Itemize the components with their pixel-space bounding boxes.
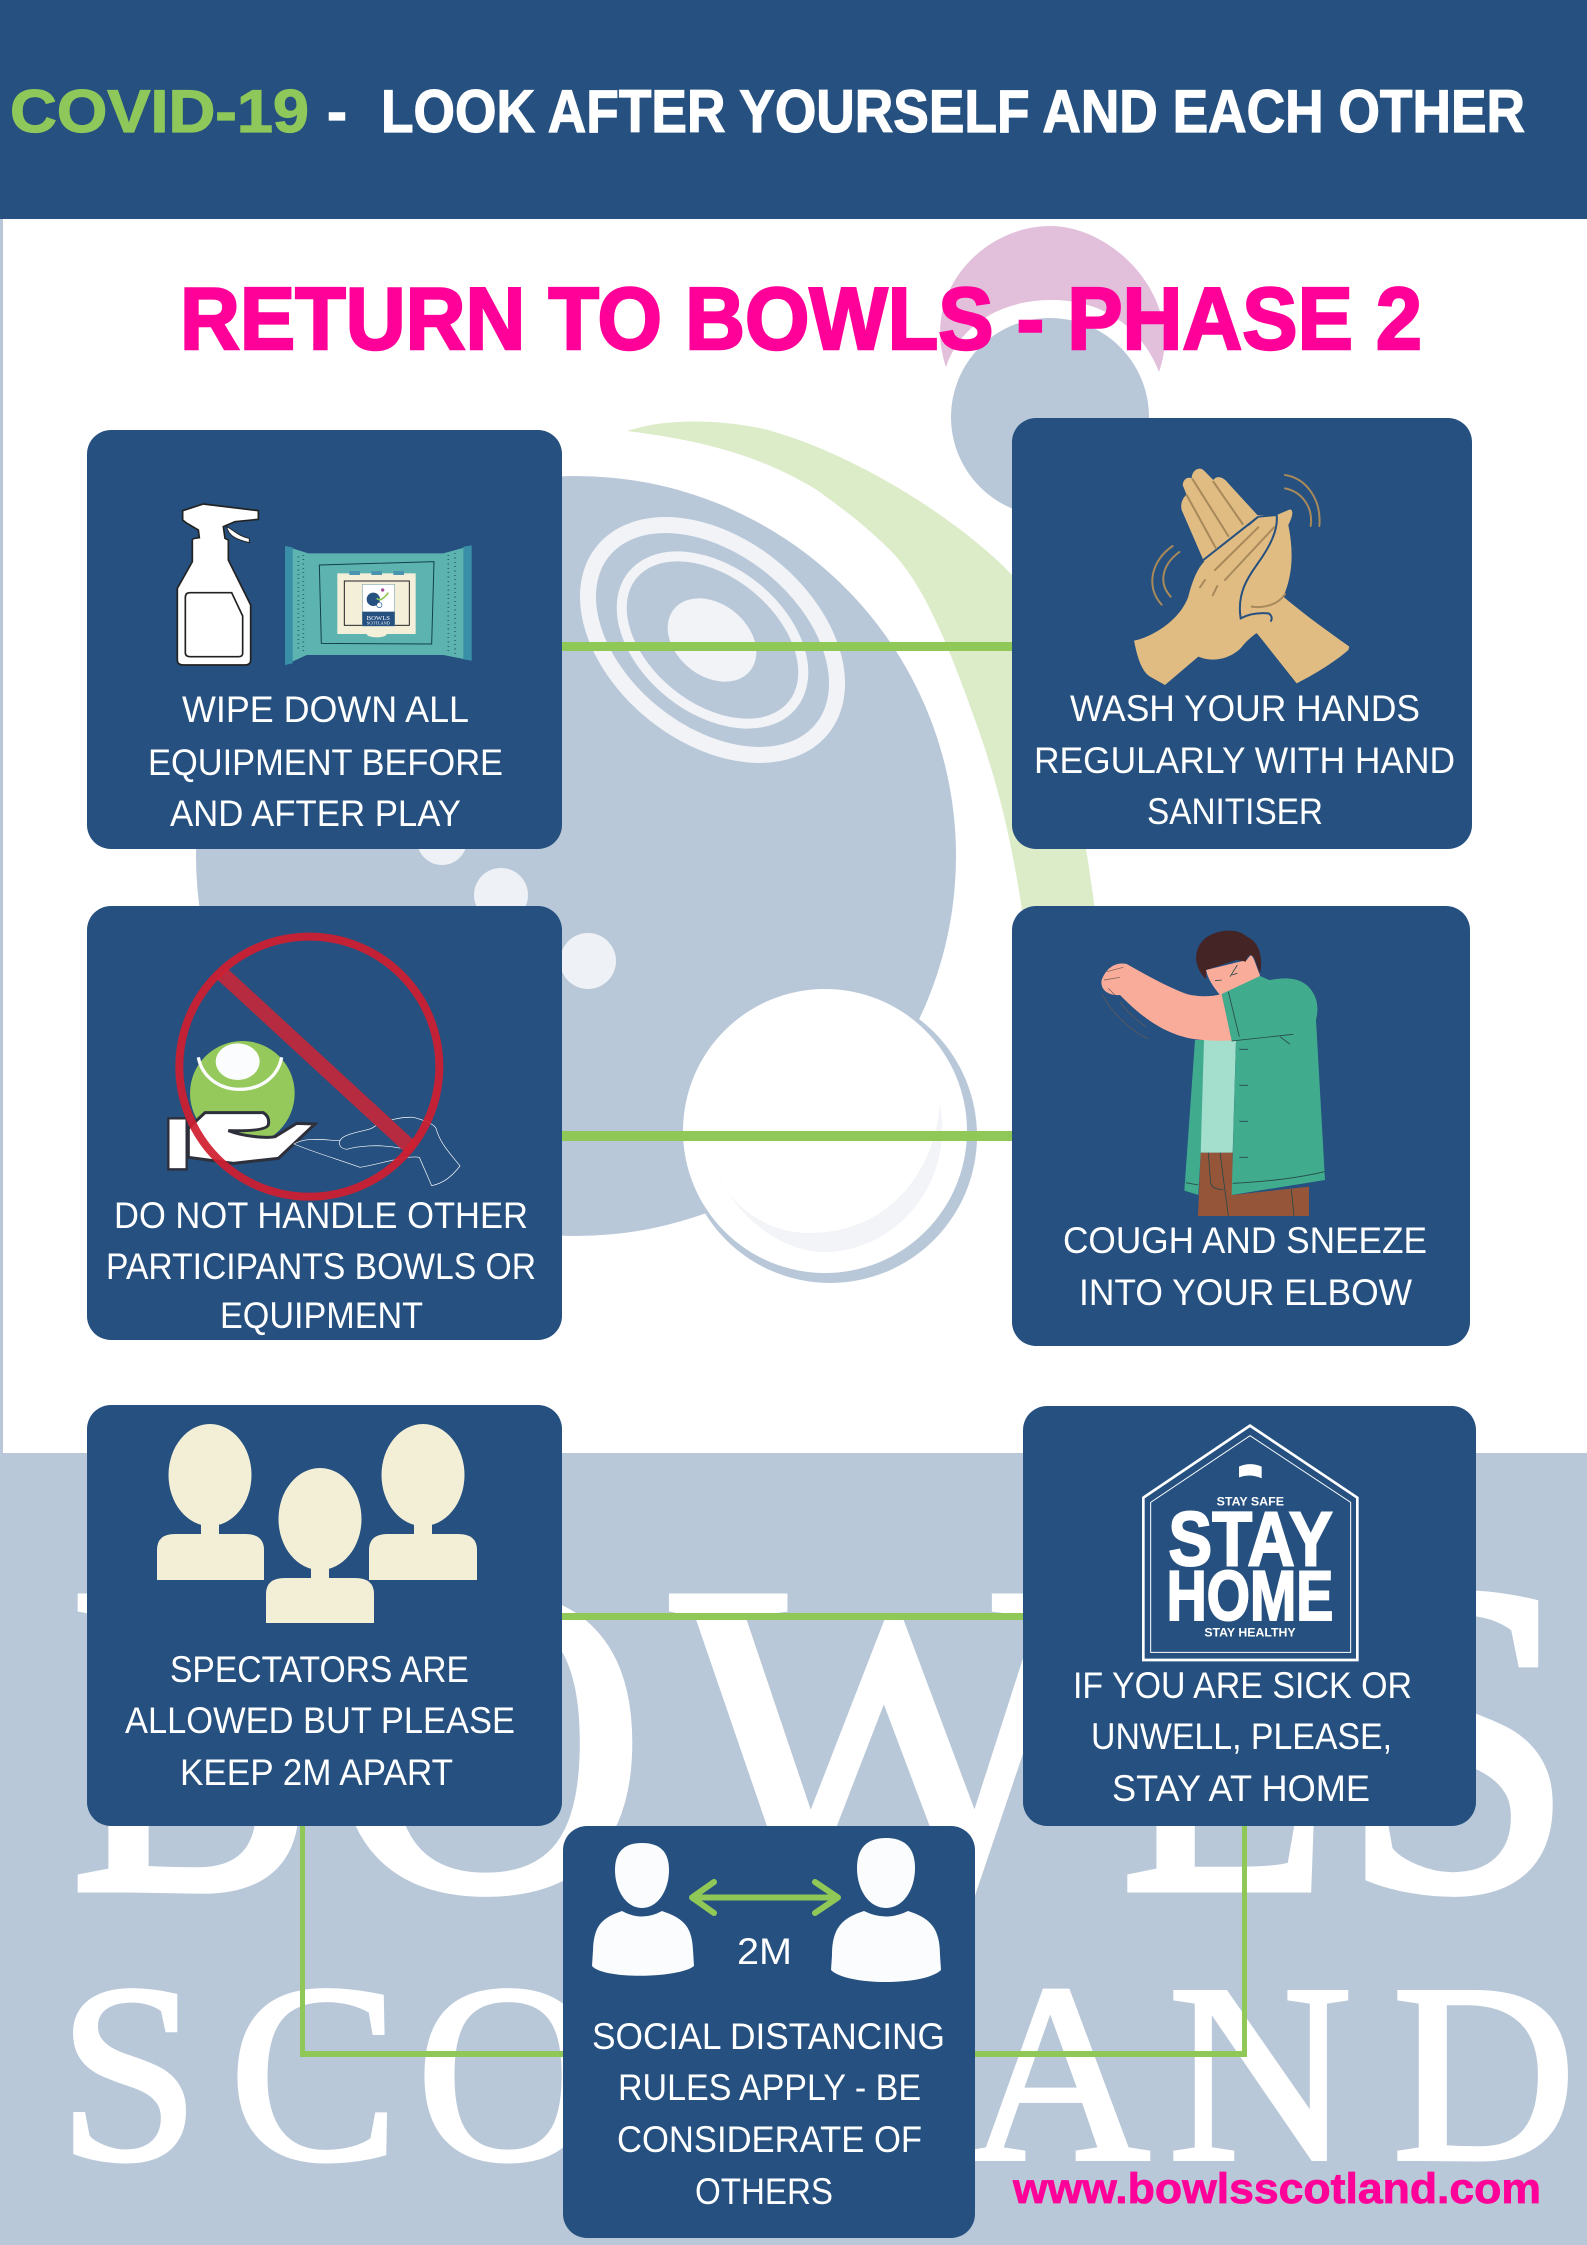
icon: man sneezing into elbow	[1101, 931, 1325, 1216]
panel text: ALLOWED BUT PLEASE	[125, 1700, 515, 1741]
icon: no handling sign	[168, 937, 460, 1197]
icon: branded wipes pack: SCOTLAND	[367, 621, 390, 626]
watermark: BOWLS SCOTLAND: B	[70, 1493, 314, 1986]
panel text	[106, 1195, 536, 1336]
watermark: BOWLS SCOTLAND: W	[672, 1493, 1097, 1986]
panel text: SOCIAL DISTANCING	[592, 2016, 945, 2057]
header band	[0, 0, 1587, 219]
header title: COVID-19	[10, 78, 309, 145]
icon: hands washing	[1134, 469, 1349, 685]
panel text: KEEP 2M APART	[180, 1752, 453, 1793]
panel text	[125, 1649, 515, 1793]
panel text: UNWELL, PLEASE,	[1091, 1716, 1392, 1757]
panel: wipe down equipment	[87, 430, 562, 849]
panel text: EQUIPMENT	[220, 1295, 423, 1336]
icon: two people 2m apart: 2M	[737, 1931, 792, 1972]
icon: stay home house badge: STAY	[1168, 1497, 1333, 1583]
panel text: REGULARLY WITH HAND	[1034, 740, 1455, 781]
panel: social distancing	[563, 1826, 975, 2238]
panel text: IF YOU ARE SICK OR	[1073, 1665, 1412, 1706]
panel text: OTHERS	[695, 2171, 833, 2212]
panel text: PARTICIPANTS BOWLS OR	[106, 1246, 536, 1287]
icon: stay home house badge	[1143, 1426, 1357, 1660]
main title: RETURN TO BOWLS - PHASE 2	[180, 269, 1422, 368]
icon: stay home house badge: STAY SAFE	[1217, 1495, 1284, 1509]
icon: three spectators	[157, 1424, 477, 1623]
panel text: INTO YOUR ELBOW	[1079, 1272, 1412, 1313]
icon: spray bottle	[177, 504, 258, 665]
panel text: AND AFTER PLAY	[170, 793, 461, 834]
panel text: SANITISER	[1147, 791, 1323, 832]
panel: wash hands	[1012, 418, 1472, 849]
panel: do not handle bowls	[87, 906, 562, 1340]
panel text	[592, 2016, 945, 2212]
panel text	[148, 689, 503, 834]
panel text: SPECTATORS ARE	[170, 1649, 469, 1690]
connector lines	[300, 642, 1247, 2057]
panel text: CONSIDERATE OF	[617, 2119, 922, 2160]
panel text: COUGH AND SNEEZE	[1063, 1220, 1427, 1261]
panel text: EQUIPMENT BEFORE	[148, 742, 503, 783]
panel: spectators	[87, 1405, 562, 1826]
panel text: WIPE DOWN ALL	[182, 689, 469, 730]
watermark: BOWLS SCOTLAND: S	[1340, 1492, 1576, 1986]
panel text	[1073, 1665, 1412, 1809]
panel text: DO NOT HANDLE OTHER	[114, 1195, 528, 1236]
panel text	[1063, 1220, 1427, 1313]
watermark: BOWLS SCOTLAND: O	[325, 1493, 647, 1986]
watermark: BOWLS SCOTLAND: L	[1120, 1492, 1332, 1986]
header title: -	[327, 78, 347, 145]
panel text: RULES APPLY - BE	[618, 2067, 921, 2108]
panel text: WASH YOUR HANDS	[1070, 688, 1420, 729]
background bowls logo artwork	[196, 226, 1165, 1283]
panel text	[1034, 688, 1455, 832]
icon: branded wipes pack	[285, 545, 472, 665]
panel text: STAY AT HOME	[1112, 1768, 1370, 1809]
icon: stay home house badge: STAY HEALTHY	[1204, 1626, 1296, 1640]
icon: two people 2m apart	[592, 1838, 941, 1982]
watermark: BOWLS SCOTLAND: SCOTLAND	[58, 1933, 1576, 2215]
panel: cough and sneeze	[1012, 906, 1470, 1346]
panel: stay home	[1023, 1406, 1476, 1826]
watermark: BOWLS SCOTLAND	[58, 1492, 1576, 2215]
icon: branded wipes pack: BOWLS	[367, 615, 390, 622]
website url: www.bowlsscotland.com	[1012, 2165, 1541, 2213]
icon: stay home house badge: HOME	[1167, 1556, 1333, 1635]
